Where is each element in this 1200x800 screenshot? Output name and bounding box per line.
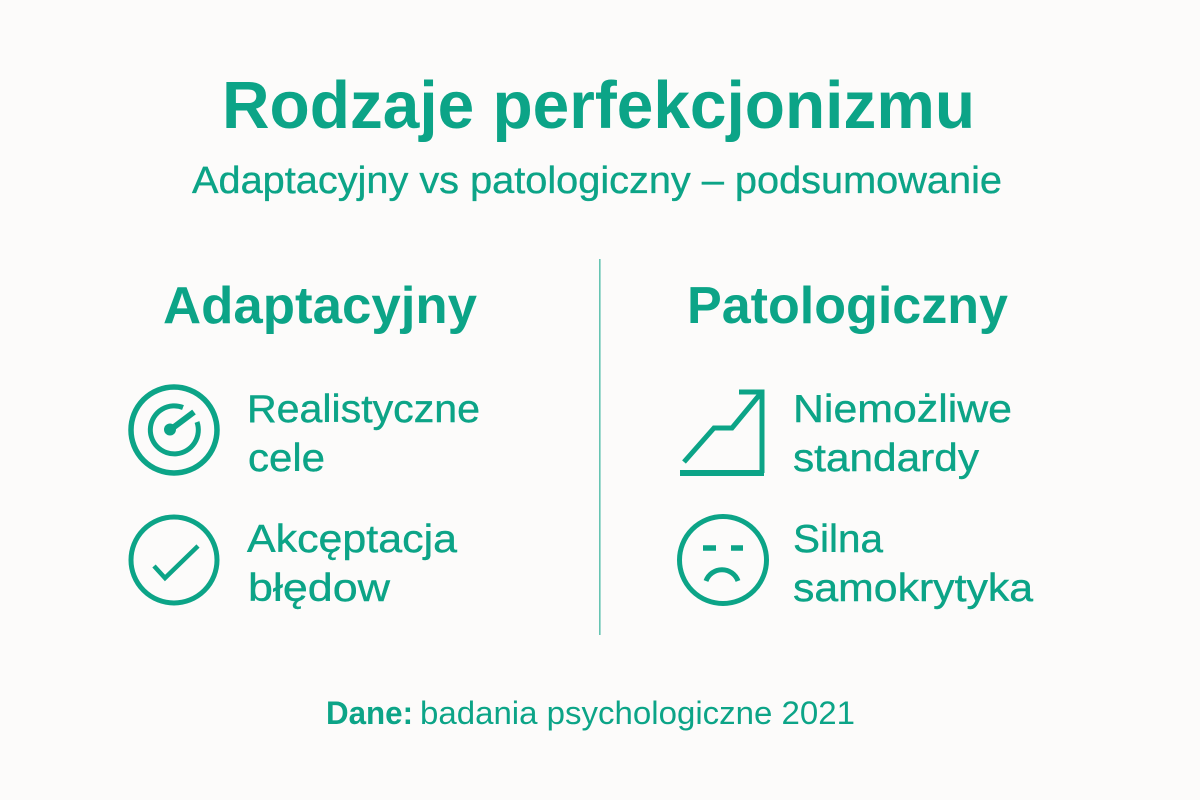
icon: check mark bbox=[131, 517, 217, 603]
text: Realistyczne cele: Realistyczne bbox=[247, 388, 480, 431]
text: Realistyczne cele bbox=[247, 388, 480, 480]
heading: Patologiczny: Patologiczny bbox=[687, 277, 1008, 335]
panel: pathological bbox=[680, 277, 1033, 610]
text: Niemozliwe standardy: Niemożliwe bbox=[793, 388, 1012, 431]
text: Realistyczne cele: cele bbox=[248, 437, 325, 480]
text: Silna samokrytyka bbox=[793, 518, 1033, 610]
text: Silna samokrytyka: Silna bbox=[793, 518, 883, 561]
text: Silna samokrytyka: samokrytyka bbox=[793, 567, 1033, 610]
icon: target goal bbox=[131, 387, 217, 473]
heading: Adaptacyjny: Adaptacyjny bbox=[163, 277, 477, 335]
title: Rodzaje perfekcjonizmu bbox=[222, 68, 975, 143]
text: Niemozliwe standardy: standardy bbox=[793, 437, 980, 480]
text: Akceptacja bledow: błędow bbox=[248, 567, 391, 610]
footer source: badania psychologiczne 2021 bbox=[420, 695, 855, 731]
footer source: Dane: bbox=[326, 695, 413, 731]
subtitle: Adaptacyjny vs patologiczny – podsumowanie bbox=[192, 160, 1002, 202]
panel: adaptive bbox=[131, 277, 480, 610]
text: Akceptacja bledow: Akcęptacja bbox=[247, 518, 457, 561]
icon: sad face bbox=[680, 516, 766, 604]
text: Akceptacja bledow bbox=[247, 518, 457, 610]
text: Niemozliwe standardy bbox=[793, 388, 1012, 480]
icon: rising stairs arrow bbox=[680, 392, 764, 473]
column divider bbox=[599, 259, 601, 635]
